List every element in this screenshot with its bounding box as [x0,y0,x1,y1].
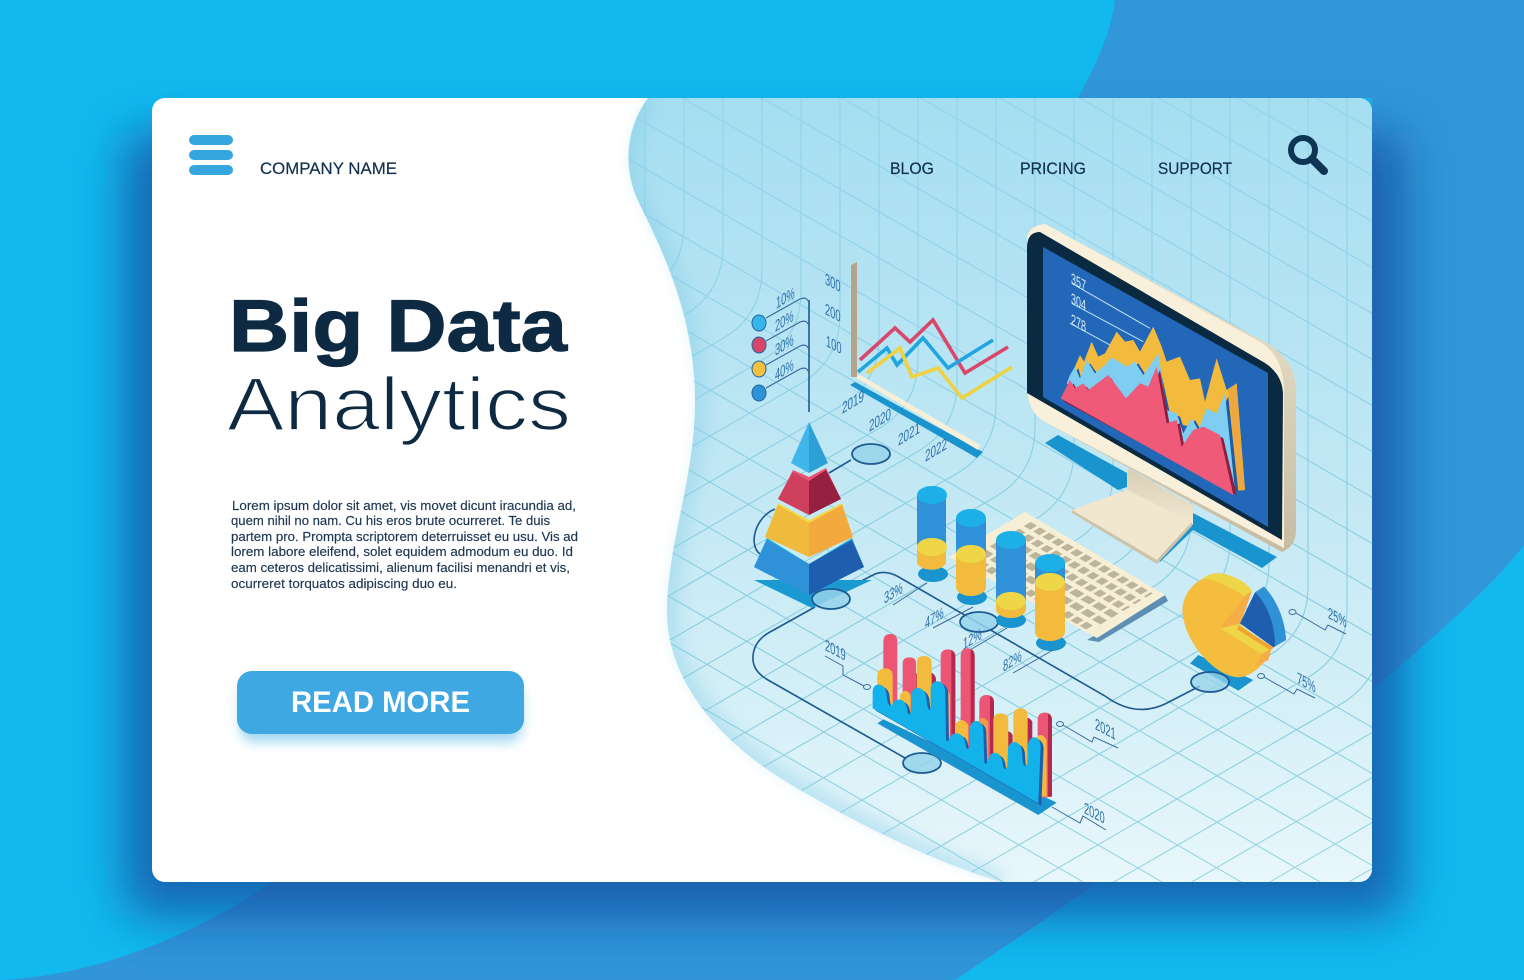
cylinder 3 [996,531,1026,628]
connector lines and nodes [753,300,1200,758]
screen labels: 304 [1071,289,1086,315]
callout labels: 2019 [825,636,846,665]
cylinder chart [884,486,1066,676]
body text: partem pro. Prompta scriptorem deterruisset eu usu. Vis ad [231,529,578,544]
cylinder 1 [917,486,948,582]
button: read more: READ MORE [291,686,470,719]
red tier [778,468,841,515]
callout labels: 75% [1297,669,1316,696]
top cone [791,422,809,473]
yellow line [867,348,1012,398]
blue tier [754,538,864,580]
pie node ellipse [1191,672,1229,692]
body text: lorem labore eleifend, solet equidem admodum eu duo. Id [231,544,573,559]
nav: blog, pricing, support: PRICING [1020,160,1086,178]
legend with percentages: 10% [776,283,795,313]
button: read more [237,671,524,742]
stand [1128,468,1193,525]
icon: hamburger menu [189,135,233,175]
screen labels [1071,274,1086,332]
line chart [825,262,1012,465]
yellow slice [1182,573,1272,677]
wave bar chart [873,634,1057,815]
axis labels: 2020 [869,404,891,435]
title: Big Data [229,286,569,367]
icon: search [1291,138,1324,171]
axis labels [825,270,947,465]
axis labels: 2021 [898,418,920,449]
screen labels: 278 [1071,310,1086,336]
cylinder labels [884,578,1053,676]
company name: COMPANY NAME [260,160,397,178]
screen [1043,247,1268,527]
axis labels: 2019 [842,386,864,417]
pie chart [1182,573,1286,691]
blue slice [1240,587,1286,647]
card shadow [124,132,1404,917]
cylinder labels: 33% [884,578,903,608]
nav: blog, pricing, support [891,162,1232,174]
chart gridlines [1070,283,1150,345]
cylinder labels: 12% [963,624,982,654]
nav: blog, pricing, support: SUPPORT [1158,160,1232,178]
data panel with grid [620,90,1380,890]
soft halo around data panel [626,98,998,882]
legend with percentages: 40% [775,355,794,385]
body text: quem nihil no nam. Cu his eros brute ocurreret. Te duis [231,513,550,528]
monitor [1027,224,1296,568]
title: Analytics [227,362,571,446]
screen chart [1061,283,1245,495]
cylinder labels: 82% [1003,646,1022,676]
chart base [850,382,983,458]
keys [970,524,1149,629]
blue line [858,338,993,372]
body text: Lorem ipsum dolor sit amet, vis movet dicunt iracundia ad, [232,498,576,513]
cylinder labels: 47% [925,603,944,633]
base [877,719,1057,815]
pie base [1190,655,1253,691]
body text [231,498,578,591]
landing page card [152,90,1380,890]
bezel [1027,232,1283,540]
axis labels: 100 [826,332,841,358]
callout labels: 2020 [1084,799,1105,828]
legend with percentages [752,283,809,401]
nav: blog, pricing, support: BLOG [890,160,934,178]
cylinder 2 [956,509,987,605]
yellow tier [765,503,853,557]
node ellipses [812,444,998,773]
callout labels: 2021 [1095,715,1116,744]
red bars [883,634,1052,798]
screen labels: 357 [1071,269,1086,295]
body text: ocurreret torquatos adipiscing duo eu. [231,576,457,591]
cylinder 4 [1035,554,1066,651]
keyboard [949,512,1168,642]
legend with percentages: 30% [775,330,794,360]
wave shadow [876,684,1044,806]
callout labels: 25% [1328,604,1347,631]
red line [860,320,1008,373]
axis labels: 200 [825,300,840,326]
title [227,286,571,446]
shadow pads [1045,435,1127,490]
callout labels [825,604,1347,830]
wave front [873,681,1041,803]
yellow bars [877,656,1047,797]
isometric pyramid [754,422,872,608]
axis labels: 2022 [925,434,947,465]
axis labels: 300 [825,270,840,296]
y axis [851,262,857,377]
body [1027,224,1296,552]
body text: eam ceteros delicatissimi, alienum facilisi menandri et vis, [231,560,570,575]
legend with percentages: 20% [775,306,794,336]
